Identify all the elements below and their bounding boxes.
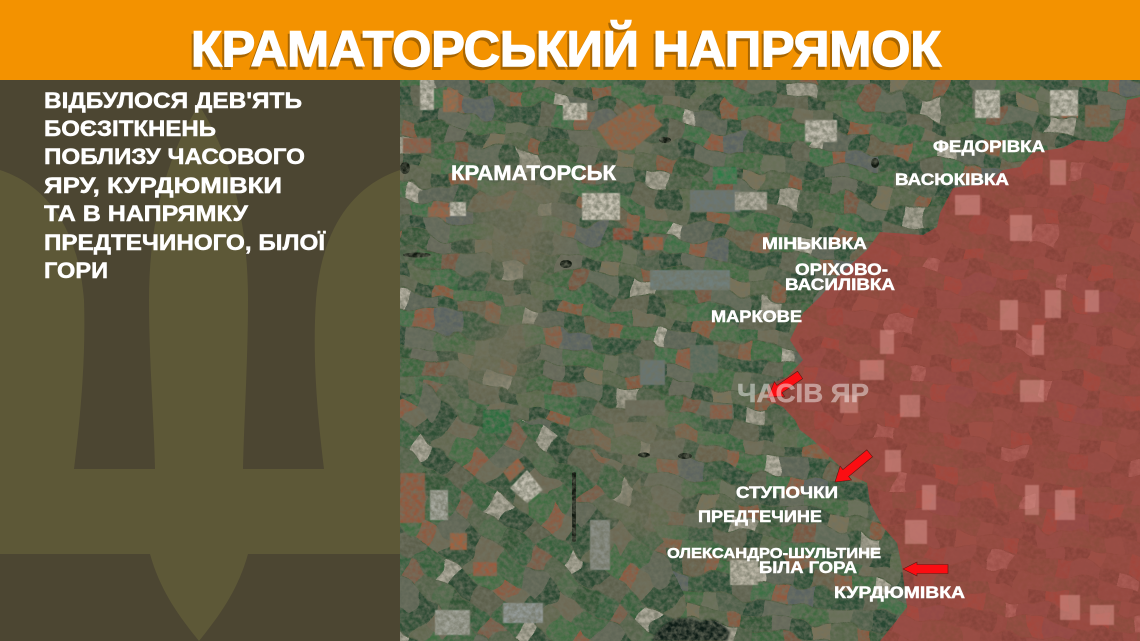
summary text: ВІДБУЛОСЯ ДЕВ'ЯТЬ xyxy=(44,88,302,113)
title: КРАМАТОРСЬКИЙ НАПРЯМОК xyxy=(191,20,941,77)
map label: Bila Hora: БІЛА ГОРА xyxy=(759,558,857,577)
map label: Chasiv Yar: ЧАСІВ ЯР xyxy=(737,378,869,408)
map label: Markove: МАРКОВЕ xyxy=(711,307,802,326)
summary text: ЯРУ, КУРДЮМІВКИ xyxy=(44,173,282,198)
fields xyxy=(400,80,1110,635)
arrow: Kurdiumivka xyxy=(903,562,948,576)
map label: Minkivka: МІНЬКІВКА xyxy=(762,234,867,253)
title: КРАМАТОРСЬКИЙ НАПРЯМОК xyxy=(189,23,939,80)
satellite map xyxy=(380,60,1140,641)
map label: Orikhovo-Vasylivka: ОРІХОВО- xyxy=(795,260,888,279)
summary text xyxy=(44,88,326,283)
arrow: Chasiv Yar xyxy=(763,367,805,404)
occupied territory overlay xyxy=(767,97,1140,641)
map label: Kurdiumivka: КУРДЮМІВКА xyxy=(834,583,965,602)
texture xyxy=(400,80,1140,641)
towns and bare ground xyxy=(443,121,700,542)
map label: Stupochky: СТУПОЧКИ xyxy=(736,483,838,502)
map label: Predtechyne: ПРЕДТЕЧИНЕ xyxy=(698,507,822,526)
water xyxy=(652,618,730,641)
map label: Orikhovo-Vasylivka: ВАСИЛІВКА xyxy=(785,275,895,294)
arrow: Stupochky xyxy=(829,446,875,489)
trident emblem xyxy=(0,105,400,641)
map label: Oleksandro-Shultyne: ОЛЕКСАНДРО-ШУЛЬТИНЕ xyxy=(667,545,881,562)
map label: Fedorivka: ФЕДОРІВКА xyxy=(933,137,1045,156)
map label: Kramatorsk: КРАМАТОРСЬК xyxy=(451,162,616,185)
pale fields in occupied territory xyxy=(840,160,1114,625)
header band xyxy=(0,0,1140,80)
ponds and streams xyxy=(400,137,879,542)
summary text: ГОРИ xyxy=(44,258,108,283)
summary text: БОЄЗІТКНЕНЬ xyxy=(44,116,216,141)
map label: Vasiukivka: ВАСЮКІВКА xyxy=(895,170,1009,189)
summary text: ПРЕДТЕЧИНОГО, БІЛОЇ xyxy=(44,230,326,255)
summary text: ПОБЛИЗУ ЧАСОВОГО xyxy=(44,144,305,169)
summary text: ТА В НАПРЯМКУ xyxy=(44,201,248,226)
map label: Orikhovo-Vasylivka xyxy=(785,260,895,294)
left panel background xyxy=(0,80,400,641)
